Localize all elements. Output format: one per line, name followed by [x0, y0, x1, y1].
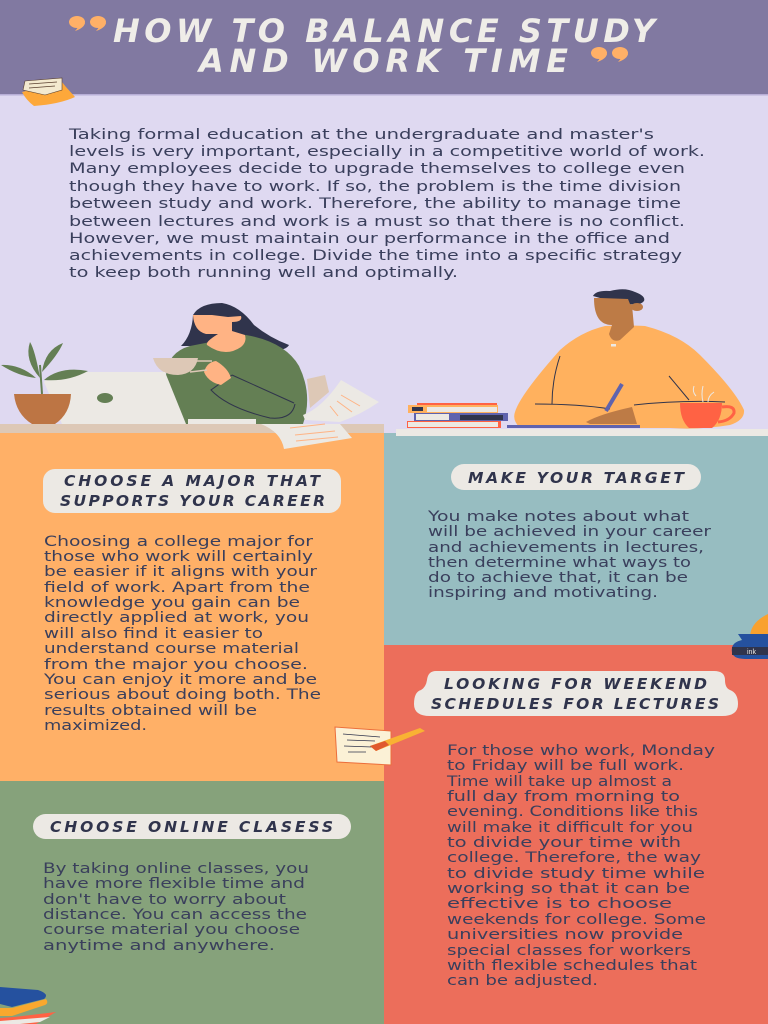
- intro text: between lectures and work is a must so that there is no conflict.: [69, 214, 685, 230]
- panel: choose online classes: [0, 781, 384, 1024]
- icon: envelope with letter: [22, 78, 75, 106]
- heading pill: online classes: CHOOSE ONLINE CLASESS: [50, 818, 333, 836]
- body text: choose a major: those who work will certainly: [44, 549, 313, 565]
- body text: weekend schedules: working so that it can be: [447, 881, 690, 897]
- body text: weekend schedules: to Friday will be full work.: [447, 758, 684, 774]
- body text: weekend schedules: weekends for college. Some: [447, 912, 706, 928]
- body text: make your target: You make notes about what: [427, 509, 690, 525]
- illustration: book stack: [407, 403, 508, 428]
- illustration: woman with coffee: [153, 303, 307, 424]
- body text: online classes: distance. You can access the: [43, 907, 307, 923]
- body text: choose a major: from the major you choose.: [44, 657, 308, 673]
- icon: stack of books corner: [0, 987, 56, 1024]
- body text: online classes: [43, 861, 309, 954]
- body text: make your target: and achievements in lectures,: [428, 540, 704, 556]
- intro text: though they have to work. If so, the problem is the time division: [69, 179, 681, 195]
- body text: choose a major: knowledge you gain can be: [44, 595, 300, 611]
- heading pill: make your target: MAKE YOUR TARGET: [468, 469, 685, 487]
- intro text: between study and work. Therefore, the ability to manage time: [69, 196, 681, 212]
- heading pill: online classes: [33, 814, 351, 839]
- body text: make your target: inspiring and motivating.: [428, 585, 658, 601]
- body text: weekend schedules: For those who work, Monday: [447, 743, 715, 759]
- header band: [0, 0, 768, 96]
- body text: weekend schedules: universities now provide: [447, 927, 683, 943]
- body text: weekend schedules: will make it difficult for you: [447, 820, 693, 836]
- body text: choose a major: [43, 534, 321, 734]
- body text: weekend schedules: to divide study time while: [447, 866, 705, 882]
- body text: weekend schedules: full day from morning to: [447, 789, 680, 805]
- body text: weekend schedules: Time will take up almost a: [446, 774, 672, 790]
- body text: choose a major: directly applied at work, you: [44, 610, 309, 626]
- body text: weekend schedules: to divide your time with: [447, 835, 681, 851]
- body text: choose a major: Choosing a college major for: [44, 534, 313, 550]
- body text: choose a major: results obtained will be: [44, 703, 257, 719]
- body text: choose a major: serious about doing both. The: [44, 687, 321, 703]
- intro text: achievements in college. Divide the time into a specific strategy: [69, 248, 682, 264]
- intro text: Taking formal education at the undergraduate and master's: [68, 127, 654, 143]
- heading pill: weekend schedules: LOOKING FOR WEEKEND: [444, 675, 707, 693]
- illustration: red cup: [680, 386, 734, 428]
- panel: looking for weekend schedules: [384, 645, 768, 1024]
- illustration: laptop: [44, 372, 256, 424]
- panel: make your target: [384, 433, 768, 645]
- body text: weekend schedules: special classes for workers: [447, 943, 691, 959]
- intro text: to keep both running well and optimally.: [69, 265, 458, 281]
- body text: online classes: By taking online classes, you: [43, 861, 309, 877]
- desk right: [396, 429, 768, 436]
- body text: choose a major: will also find it easier to: [44, 626, 263, 642]
- body text: online classes: anytime and anywhere.: [43, 938, 275, 954]
- heading pill: weekend schedules: [414, 671, 738, 716]
- heading pill: choose a major: CHOOSE A MAJOR THAT: [64, 472, 321, 490]
- intro text: However, we must maintain our performance in the office and: [69, 231, 670, 247]
- intro text: Many employees decide to upgrade themselves to college even: [69, 161, 685, 177]
- body text: weekend schedules: college. Therefore, the way: [447, 850, 701, 866]
- body text: choose a major: field of work. Apart from the: [44, 580, 310, 596]
- body text: choose a major: You can enjoy it more and be: [43, 672, 317, 688]
- heading pill: choose a major: [43, 469, 341, 513]
- body text: choose a major: understand course material: [44, 641, 299, 657]
- heading pill: make your target: [451, 464, 701, 490]
- body text: online classes: don't have to worry about: [43, 892, 287, 908]
- body text: online classes: have more flexible time and: [43, 876, 305, 892]
- panel: choose a major: [0, 433, 384, 781]
- icon: ink bottle with quill: ink: [747, 649, 756, 656]
- illustration: scattered papers: [261, 375, 379, 449]
- illustration: plant: [1, 342, 88, 424]
- body text: make your target: will be achieved in your career: [428, 524, 711, 540]
- title: [113, 12, 658, 80]
- intro text: levels is very important, especially in a competitive world of work.: [69, 144, 705, 160]
- body text: weekend schedules: can be adjusted.: [447, 973, 598, 989]
- intro text: [68, 127, 705, 281]
- body text: weekend schedules: evening. Conditions like this: [447, 804, 698, 820]
- body text: weekend schedules: effective is to choose: [447, 896, 672, 912]
- icon: notebook with pencil: [335, 727, 425, 765]
- body text: online classes: course material you choose: [43, 922, 300, 938]
- body text: choose a major: maximized.: [44, 718, 147, 734]
- desk left: [0, 424, 384, 433]
- icon: ink bottle with quill: [732, 614, 768, 659]
- body text: choose a major: be easier if it aligns with your: [44, 564, 317, 580]
- title: AND WORK TIME: [196, 42, 568, 80]
- icon: opening quote marks: [69, 16, 106, 31]
- body text: make your target: [427, 509, 711, 601]
- title: HOW TO BALANCE STUDY: [113, 12, 658, 50]
- body text: weekend schedules: [446, 743, 715, 989]
- icon: closing quote marks: [591, 47, 628, 62]
- body text: make your target: then determine what ways to: [428, 555, 691, 571]
- heading pill: weekend schedules: SCHEDULES FOR LECTURES: [431, 695, 719, 713]
- body text: make your target: do to achieve that, it can be: [428, 570, 688, 586]
- heading pill: choose a major: SUPPORTS YOUR CAREER: [60, 492, 325, 510]
- body text: weekend schedules: with flexible schedules that: [447, 958, 698, 974]
- illustration: man writing: [507, 289, 744, 429]
